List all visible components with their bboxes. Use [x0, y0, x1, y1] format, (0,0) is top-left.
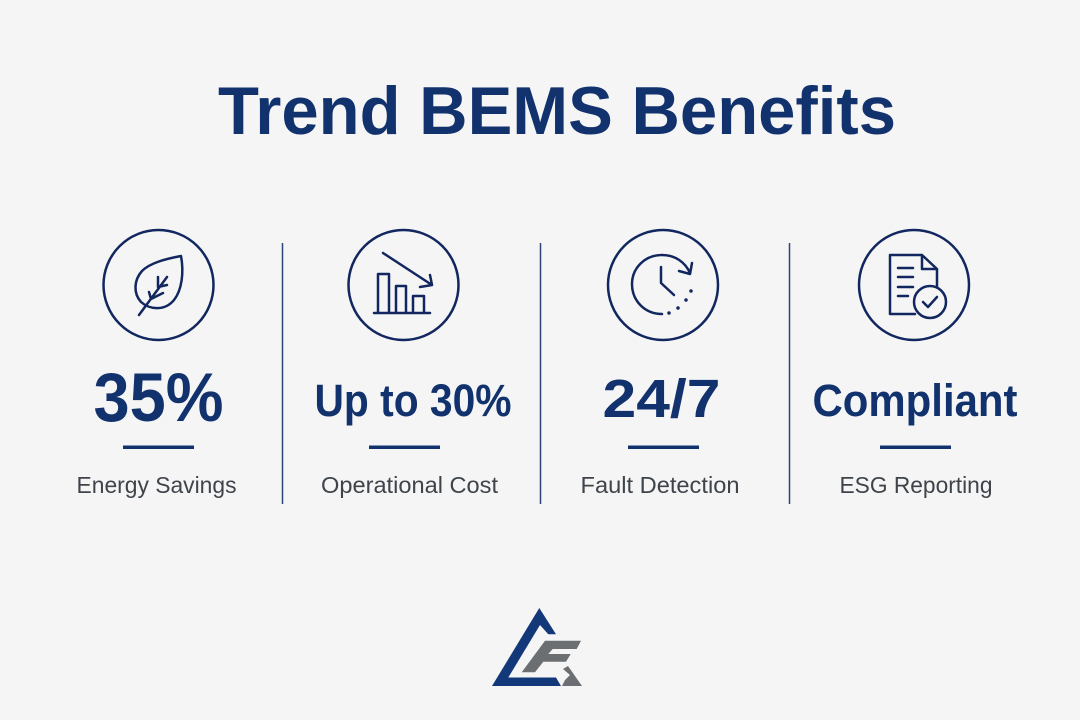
panel: operational cost: [314, 230, 512, 498]
stat: up to 30%: Up to 30%: [314, 375, 512, 426]
panel: ESG reporting: [812, 230, 1018, 498]
panel: fault detection: [580, 230, 740, 498]
label: fault detection: Fault Detection: [580, 472, 740, 498]
icon: clock with arrow: [608, 230, 718, 340]
stat: compliant: Compliant: [812, 375, 1018, 426]
icon: falling bar chart: [348, 230, 458, 340]
icon: leaf: [104, 230, 214, 340]
icon: document with check: [859, 230, 969, 340]
stat: 24/7: 24/7: [602, 369, 720, 429]
stat: 35%: 35%: [94, 359, 224, 436]
title: Trend BEMS Benefits: [218, 73, 896, 149]
label: ESG reporting: ESG Reporting: [840, 472, 992, 498]
label: operational cost: Operational Cost: [321, 472, 499, 498]
logo: [492, 608, 582, 686]
label: energy savings: Energy Savings: [76, 472, 236, 498]
panel: energy savings: [76, 230, 236, 498]
